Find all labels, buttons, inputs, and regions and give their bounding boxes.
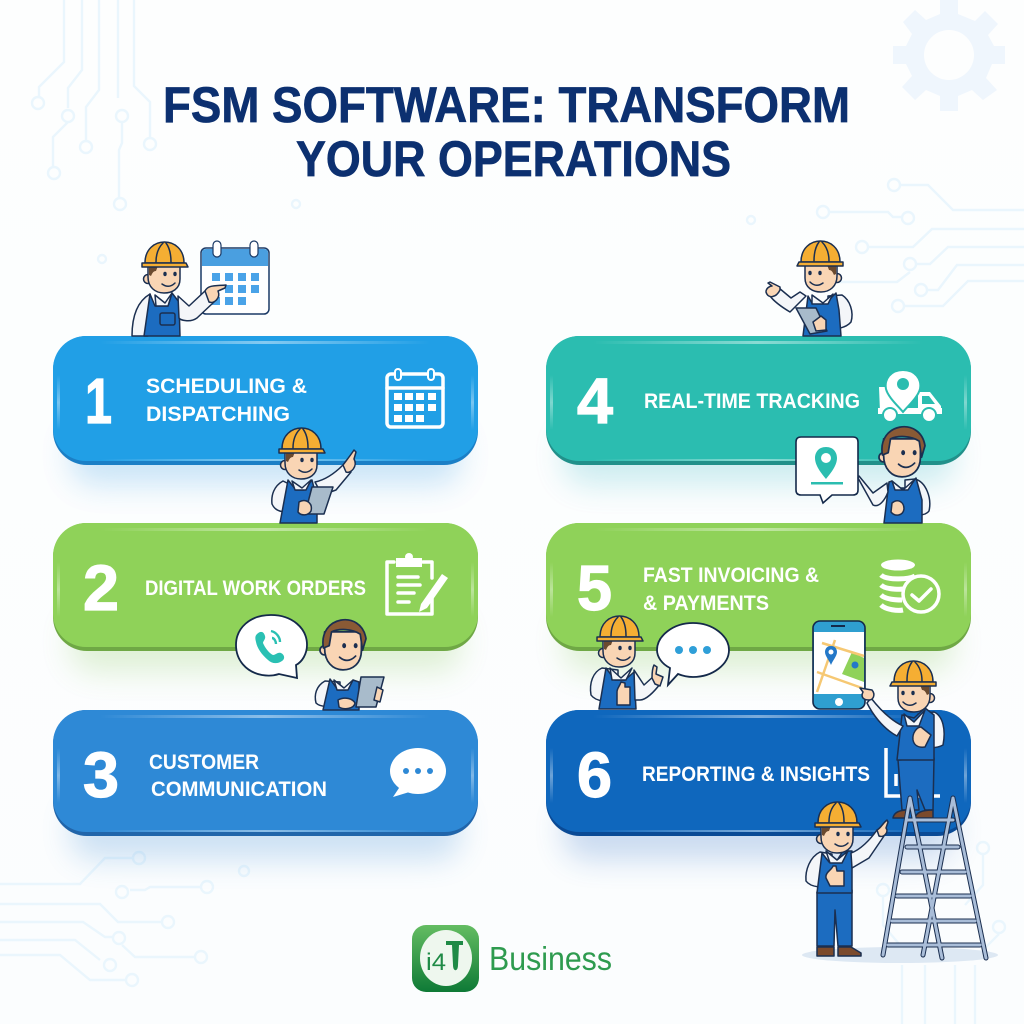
ground shadow (802, 947, 998, 963)
label: COMMUNICATION (151, 778, 327, 801)
panel: reporting and insights (546, 710, 971, 860)
title: FSM SOFTWARE: TRANSFORM (163, 77, 850, 133)
label: FAST INVOICING & (643, 564, 819, 587)
icon: chat bubble (390, 748, 446, 797)
label: REAL-TIME TRACKING (644, 390, 860, 413)
label: CUSTOMER (149, 751, 259, 774)
panel: scheduling and dispatching (53, 336, 478, 485)
number 4: 4 (577, 365, 613, 437)
title: YOUR OPERATIONS (296, 131, 731, 187)
icon: delivery truck with pin (878, 370, 942, 422)
background circuit: bottom right (877, 842, 1005, 1024)
icon: coins with check (881, 560, 939, 612)
worker with tablet and phone-call bubble (236, 615, 384, 710)
label: DISPATCHING (146, 403, 290, 426)
number 6: 6 (577, 739, 612, 811)
panel: customer communication (53, 710, 478, 860)
label: DIGITAL WORK ORDERS (145, 577, 366, 600)
background gear icon (893, 0, 1005, 111)
stepladder (883, 798, 986, 958)
worker with calendar (132, 241, 269, 336)
background circuit: bottom left (0, 852, 249, 986)
label: SCHEDULING & (146, 375, 307, 398)
label: & PAYMENTS (643, 592, 769, 615)
worker with tablet on top of tracking panel (766, 241, 852, 336)
icon: bar chart (886, 748, 940, 796)
label (643, 564, 819, 615)
number 2: 2 (83, 552, 119, 624)
phone with map (813, 621, 865, 709)
panel: real-time tracking (546, 336, 971, 485)
label: REPORTING & INSIGHTS (642, 763, 870, 786)
legs and boots (893, 758, 934, 818)
icon: calendar (387, 369, 443, 427)
panel: digital work orders (53, 523, 478, 672)
speech bubble with dots (657, 623, 729, 685)
background circuit: right (747, 179, 1024, 312)
worker holding location sign (796, 427, 930, 523)
worker with chat bubble (590, 616, 729, 709)
number 3: 3 (83, 739, 119, 811)
label (149, 751, 327, 801)
speech bubble with phone icon (236, 615, 307, 678)
logo wordmark: Business (489, 940, 612, 977)
location sign (796, 437, 858, 503)
title (163, 77, 850, 187)
worker on ladder (860, 661, 944, 818)
worker with tablet pointing (272, 428, 356, 523)
panel: fast invoicing and payments (546, 523, 971, 672)
number 5: 5 (577, 552, 612, 624)
icon: clipboard and pen (387, 553, 448, 614)
number 1: 1 (85, 365, 112, 437)
worker standing by ladder (806, 802, 888, 956)
calendar board (201, 241, 269, 314)
logo badge (412, 925, 479, 992)
logo badge: i4 (426, 949, 446, 976)
background circuit: top left (32, 0, 300, 263)
label (146, 375, 307, 426)
logo (412, 925, 612, 992)
